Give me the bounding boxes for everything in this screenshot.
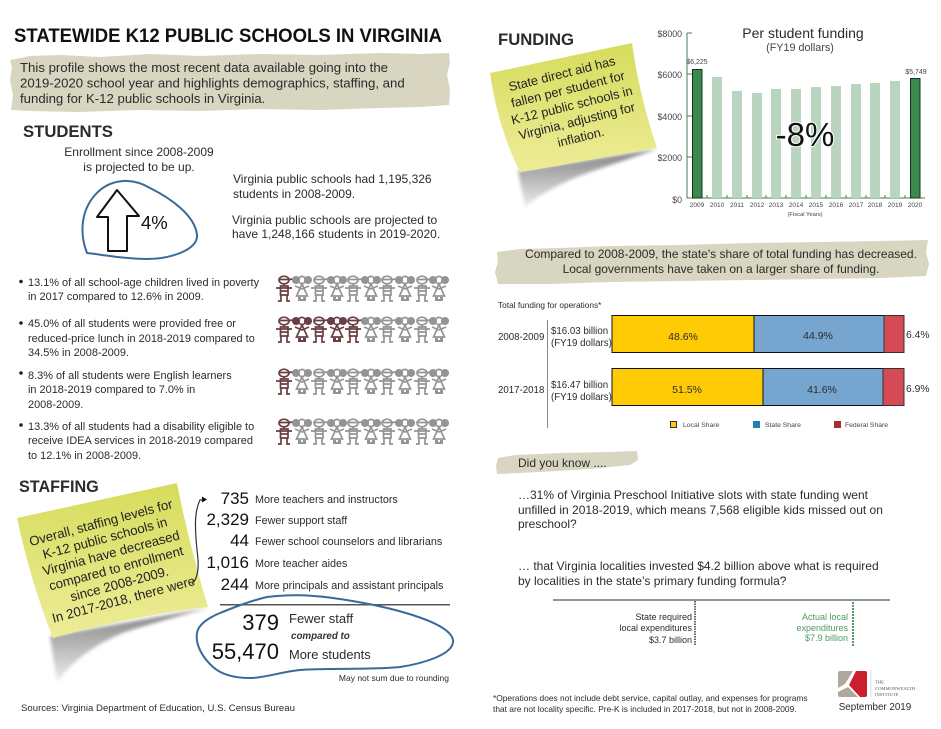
bar chart: per student funding: 2020 [908,202,923,209]
list: student statistics: 13.3% of all students had a disability eligible to [28,421,254,433]
sticky note: funding: inflation. [556,124,606,150]
sticky note: funding: Virginia, adjusting for [517,99,637,143]
chart: required versus actual local expenditures: $7.9 billion [805,633,848,643]
text: preschool fact: preschool? [518,517,577,531]
heading: staffing: STAFFING [19,478,99,496]
text: preschool fact: …31% of Virginia Preschool Initiative slots with state funding went [518,488,869,502]
bar chart: per student funding: 2012 [750,202,765,209]
text: footnote: *Operations does not include debt service, capital outlay, and expenses for programs [493,693,808,703]
sticky note: staffing: Overall, staffing levels for [28,496,175,549]
sticky note: funding [490,43,657,207]
bar chart: per student funding: 2018 [868,202,883,209]
heading: funding: FUNDING [498,30,574,49]
list: staffing changes: More teachers and instructors [255,494,398,506]
callout: staff versus students: More students [289,647,371,662]
list: student statistics: 34.5% in 2008-2009. [28,347,129,359]
bar chart: per student funding: 2017 [849,202,864,209]
icon: free lunch pictogram row [276,317,448,342]
bar chart: per student funding: 2011 [730,202,744,209]
chart: required versus actual local expenditures: State required [635,612,692,622]
stacked bar chart: total funding: (FY19 dollars) [551,392,612,403]
text: sources: Sources: Virginia Department of Education, U.S. Census Bureau [21,703,295,714]
text: localities fact: by localities in the state's primary funding formula? [518,574,787,588]
sticky note: funding: State direct aid has [507,53,617,94]
icon: enrollment arrow in circle: 4% [141,212,168,233]
callout: staff versus students: compared to [291,631,350,642]
bar chart: per student funding: 2010 [710,202,725,209]
chart: required versus actual local expenditures: $3.7 billion [649,635,692,645]
bar chart: per student funding: 2016 [829,202,844,209]
logo: The Commonwealth Institute: INSTITUTE [875,692,899,697]
text: enrollment counts [232,172,440,241]
arrow: note to staffing list [192,496,207,584]
sticky note: funding: K-12 public schools in [510,83,634,128]
text: preschool fact: unfilled in 2018-2019, which means 7,568 eligible kids missed out on [518,503,883,517]
bar chart: per student funding: $0 [672,195,682,205]
bar chart: per student funding: Per student funding [742,25,864,41]
icon: English learners pictogram row [276,369,448,394]
stacked bar chart: total funding: 2008-2009 [498,332,544,343]
list: staffing changes [206,489,444,594]
stacked bar chart: total funding: 44.9% [803,330,833,342]
text: enrollment counts: Virginia public schools had 1,195,326 [233,172,432,186]
list: student statistics: in 2017 compared to 12.6% in 2009. [28,291,204,303]
text: footnote: that are not locality specific. Pre-K is included in 2017-2018, but not in 2008-2009. [493,704,797,714]
list: student statistics: 8.3% of all students were English learners [28,370,232,382]
legend: funding shares: State Share [765,422,801,429]
list: student statistics: to 12.1% in 2008-2009. [28,450,141,462]
list: student statistics: receive IDEA services in 2018-2019 compared [28,435,253,447]
bar chart: per student funding: (Fiscal Years) [787,212,823,218]
callout: staff versus students: 55,470 [212,639,279,664]
bar chart: per student funding: $8000 [658,29,682,39]
panel: share of funding statement: Compared to 2008-2009, the state's share of total funding has decreased. [525,247,917,261]
stacked bar chart: total funding: (FY19 dollars) [551,338,612,349]
list: staffing changes: More principals and assistant principals [255,580,444,592]
chart: required versus actual local expenditures: Actual local [802,612,848,622]
bar chart: per student funding: $5,749 [905,69,927,76]
panel: share of funding statement [495,240,929,284]
chart: required versus actual local expenditures: expenditures [796,623,848,633]
stacked bar chart: total funding: 6.9% [906,384,929,395]
logo: The Commonwealth Institute: THE [875,680,884,684]
list: student statistics [19,277,260,462]
stacked bar chart: total funding: 48.6% [668,331,698,343]
bar chart: per student funding: 2013 [769,202,784,209]
icon: poverty pictogram row [276,276,448,301]
text: enrollment counts: have 1,248,166 students in 2019-2020. [232,227,440,241]
heading: students: STUDENTS [23,122,113,141]
list: student statistics: in 2018-2019 compared to 7.0% in [28,384,195,396]
bar chart: per student funding: (FY19 dollars) [766,42,834,54]
list: staffing changes: 244 [221,575,249,594]
stacked bar chart: total funding: Total funding for operations* [498,300,602,310]
list: staffing changes: 44 [230,531,249,550]
stacked bar chart: total funding: 51.5% [672,384,702,396]
sticky note: staffing: compared to enrollment [47,543,185,593]
legend: funding shares: Federal Share [845,422,888,429]
list: staffing changes: Fewer school counselors and librarians [255,536,443,548]
list: staffing changes: More teacher aides [255,558,348,570]
panel: introduction: funding for K-12 public schools in Virginia. [20,91,265,106]
list: student statistics: 45.0% of all students were provided free or [28,318,236,330]
text: enrollment counts: Virginia public schools are projected to [232,213,438,227]
sticky note: staffing [17,483,208,682]
stacked bar chart: total funding: $16.03 billion [551,326,608,337]
text: localities fact: … that Virginia localities invested $4.2 billion above what is required [518,559,879,573]
panel: did you know heading: Did you know .... [518,456,607,470]
callout: staff versus students [197,595,453,678]
panel: introduction [10,53,450,112]
list: staffing changes: 735 [221,489,249,508]
panel: introduction: This profile shows the most recent data available going into the [20,60,388,75]
sticky note: staffing: since 2008-2009. [69,564,170,604]
stacked bar chart: total funding [498,300,929,428]
stacked bar chart: total funding: 41.6% [807,384,837,396]
sticky note: staffing: K-12 public schools in [41,514,169,562]
callout: staff versus students: 379 [242,610,279,635]
text: enrollment note: is projected to be up. [83,160,195,174]
sticky note: funding: fallen per student for [509,68,627,111]
list: staffing changes: Fewer support staff [255,515,348,527]
panel: did you know heading [496,451,638,474]
logo: The Commonwealth Institute: COMMONWEALTH [875,686,916,691]
text: date: September 2019 [839,702,911,713]
bar chart: per student funding: 2019 [888,202,903,209]
list: staffing changes: 1,016 [206,553,249,572]
sticky note: staffing: In 2017-2018, there were [50,573,197,626]
bar chart: per student funding: 2009 [690,202,705,209]
sticky note: staffing: Virginia have decreased [41,528,181,579]
legend: funding shares [670,421,888,429]
callout: staff versus students: Fewer staff [289,611,353,626]
bar chart: per student funding: $6000 [658,70,682,80]
text: enrollment note: Enrollment since 2008-2009 [64,145,214,159]
list: student statistics: 2008-2009. [28,399,83,411]
note: rounding: May not sum due to rounding [339,673,449,683]
chart: required versus actual local expenditures: local expenditures [619,623,692,633]
bar chart: per student funding: 2015 [809,202,824,209]
bar chart: per student funding: -8% [776,116,834,153]
list: student statistics: 13.1% of all school-age children lived in poverty [28,277,260,289]
bar chart: per student funding [658,25,927,218]
bar chart: per student funding: $2000 [658,153,682,163]
bar chart: per student funding: $6,225 [686,59,708,66]
panel: introduction: 2019-2020 school year and highlights demographics, staffing, and [20,76,405,90]
panel: share of funding statement: Local governments have taken on a larger share of funding. [563,262,879,276]
logo: The Commonwealth Institute [838,670,916,697]
chart: required versus actual local expenditures [553,600,890,646]
legend: funding shares: Local Share [683,422,719,429]
list: staffing changes: 2,329 [206,510,249,529]
list: student statistics: reduced-price lunch in 2018-2019 compared to [28,333,255,345]
title: STATEWIDE K12 PUBLIC SCHOOLS IN VIRGINIA [14,26,442,47]
stacked bar chart: total funding: 6.4% [906,330,929,341]
icon: enrollment arrow in circle [82,181,197,259]
text: enrollment counts: students in 2008-2009. [233,187,355,201]
bar chart: per student funding: 2014 [789,202,804,209]
stacked bar chart: total funding: 2017-2018 [498,385,544,396]
bar chart: per student funding: $4000 [658,112,682,122]
icon: disability pictogram row [276,419,448,444]
stacked bar chart: total funding: $16.47 billion [551,380,608,391]
